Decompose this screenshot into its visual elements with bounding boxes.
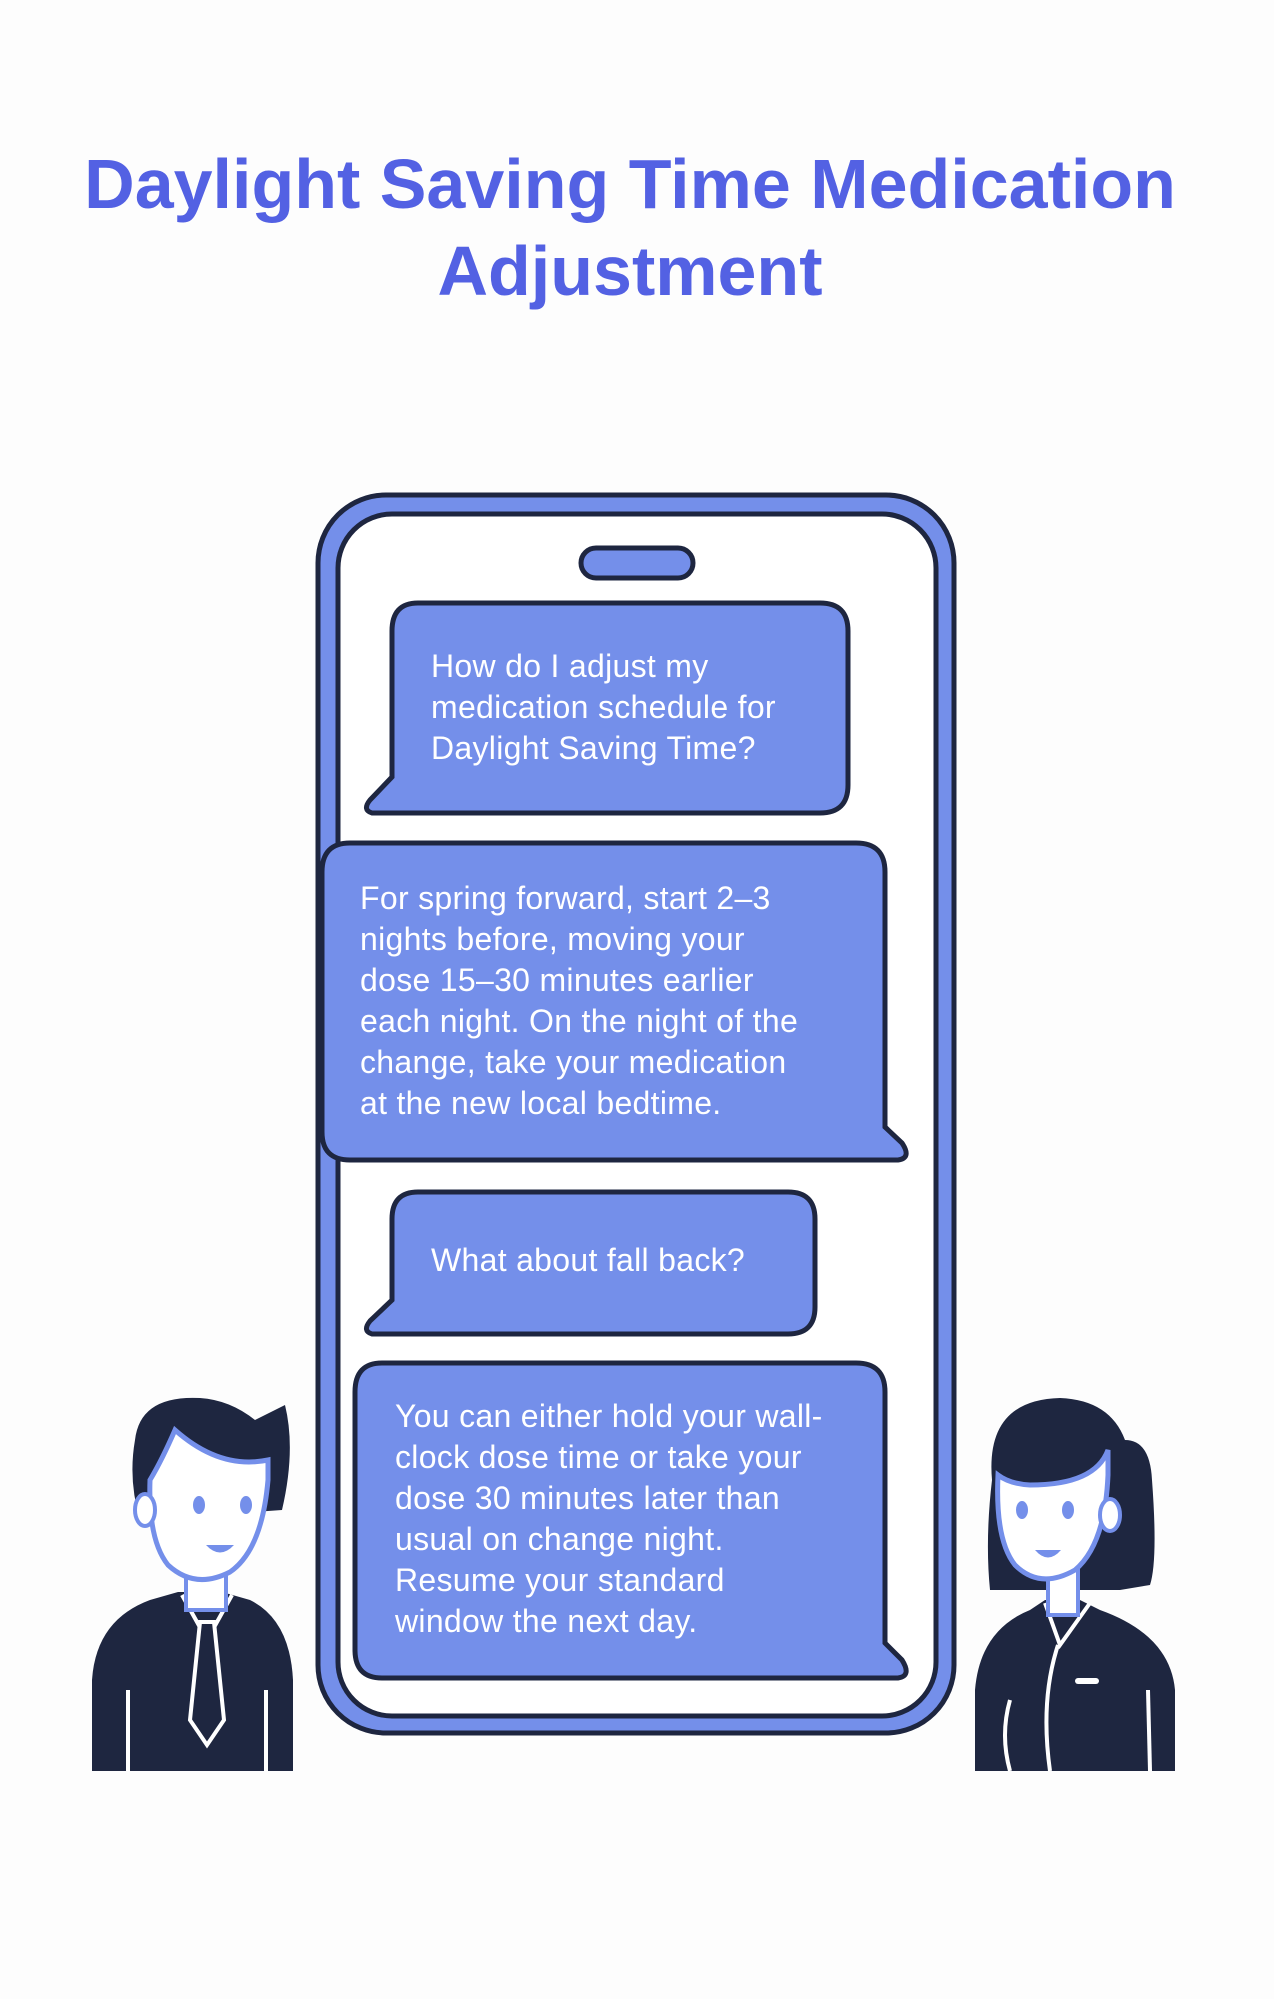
bubble 1: question bbox=[366, 603, 848, 813]
bubble 2: spring forward answer: For spring forward, start 2–3 bbox=[360, 880, 771, 916]
title bbox=[84, 145, 1176, 310]
notch bbox=[581, 548, 693, 578]
woman character bbox=[975, 1398, 1175, 1771]
bubble 4: fall back answer: usual on change night. bbox=[395, 1521, 724, 1557]
bubble 2: spring forward answer bbox=[322, 843, 906, 1160]
title: Adjustment bbox=[438, 232, 822, 310]
bubble 4: fall back answer: window the next day. bbox=[394, 1603, 697, 1639]
bubble 1: question: Daylight Saving Time? bbox=[431, 730, 756, 766]
bubble 2: spring forward answer: dose 15–30 minutes earlier bbox=[360, 962, 754, 998]
bubble 2: spring forward answer: nights before, moving your bbox=[360, 921, 745, 957]
bubble 1: question: medication schedule for bbox=[431, 689, 776, 725]
phone bbox=[318, 495, 954, 1733]
bubble 2: spring forward answer: change, take your medication bbox=[360, 1044, 786, 1080]
bubble 4: fall back answer bbox=[355, 1363, 906, 1678]
bubble 2: spring forward answer: at the new local bedtime. bbox=[360, 1085, 721, 1121]
bubble 4: fall back answer: clock dose time or take your bbox=[395, 1439, 802, 1475]
bubble 4: fall back answer: Resume your standard bbox=[395, 1562, 725, 1598]
bubble 3: fall back question bbox=[366, 1192, 815, 1334]
bubble 3: fall back question: What about fall back? bbox=[431, 1242, 745, 1278]
bubble 4: fall back answer: You can either hold your wall- bbox=[395, 1398, 823, 1434]
bubble 1: question: How do I adjust my bbox=[431, 648, 709, 684]
man character bbox=[92, 1398, 293, 1771]
bubble 2: spring forward answer: each night. On the night of the bbox=[360, 1003, 798, 1039]
title: Daylight Saving Time Medication bbox=[84, 145, 1176, 223]
bubble 4: fall back answer: dose 30 minutes later than bbox=[395, 1480, 780, 1516]
